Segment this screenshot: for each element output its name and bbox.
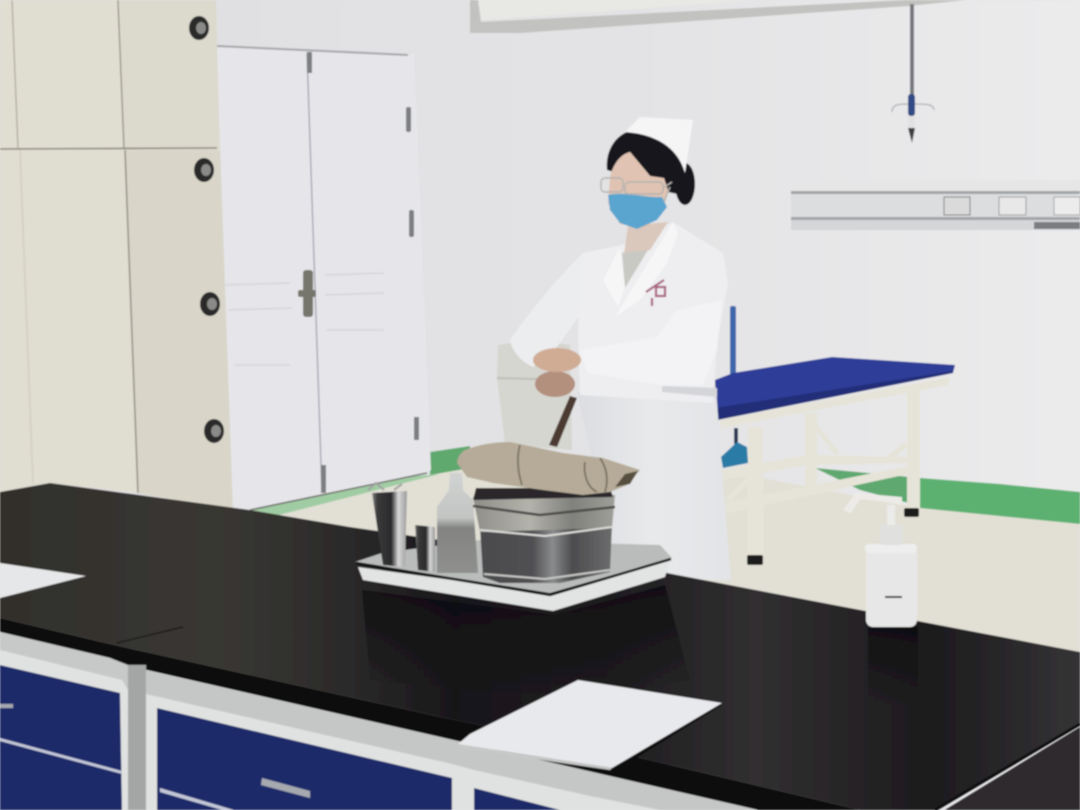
- hair bun: [675, 163, 695, 205]
- wall: [0, 0, 1080, 540]
- hair: [607, 129, 686, 195]
- floor: [250, 468, 1080, 670]
- right collar: [615, 222, 678, 317]
- sterilising drum: [473, 488, 615, 583]
- tray surface: [355, 540, 672, 593]
- IV pole: [892, 4, 934, 143]
- sanitizer pump bottle: [843, 493, 917, 627]
- wall service panel: [791, 180, 1080, 230]
- counter front edge: [0, 618, 860, 810]
- small steel jar: [415, 525, 435, 572]
- drawers centre: [146, 670, 758, 810]
- tray reflection: [362, 585, 690, 700]
- green skirting board: [252, 446, 1080, 524]
- arm sleeve: [580, 300, 722, 385]
- examination bed: [715, 306, 955, 565]
- bed mattress: [715, 357, 955, 420]
- forceps handles: [368, 483, 402, 490]
- counter top: [0, 483, 1080, 810]
- bottle reflection: [868, 627, 918, 707]
- bed frame: [720, 377, 950, 557]
- pillar: [128, 665, 146, 810]
- document on counter right: [458, 680, 722, 771]
- locker number tags: [189, 16, 224, 443]
- coat torso: [578, 222, 728, 403]
- neighbouring counter: [935, 724, 1080, 810]
- nurse: [510, 117, 731, 580]
- neck: [624, 222, 668, 254]
- counter seam: [117, 627, 183, 643]
- coat belt: [662, 386, 717, 397]
- waste bin: [497, 340, 572, 450]
- ceiling rail: [470, 0, 966, 33]
- drawers left: [0, 632, 146, 810]
- grey undershirt: [622, 250, 648, 288]
- door hinges: [307, 52, 419, 493]
- wrapped cloth bundle: [457, 442, 640, 495]
- cabinets: [0, 0, 233, 510]
- nurse cap: [625, 117, 693, 173]
- right sleeve: [510, 253, 583, 367]
- left collar: [603, 247, 625, 307]
- face: [608, 152, 668, 228]
- coat embroidery: [646, 280, 665, 306]
- mask: [608, 194, 667, 229]
- door handle: [298, 270, 316, 317]
- bed feet: [747, 508, 919, 565]
- lower coat: [577, 388, 731, 580]
- double door: [217, 46, 431, 510]
- tray rim: [356, 559, 671, 595]
- tray side: [358, 560, 670, 611]
- drawer handle: [261, 778, 310, 798]
- hands: [533, 348, 581, 397]
- glass bottle: [437, 473, 478, 573]
- mop stick and dustpan: [721, 306, 748, 468]
- glasses: [601, 178, 672, 202]
- forceps jar: [372, 491, 407, 567]
- steel instrument tray: [355, 442, 672, 611]
- document on counter left: [0, 563, 86, 598]
- handle behind hands: [549, 396, 577, 447]
